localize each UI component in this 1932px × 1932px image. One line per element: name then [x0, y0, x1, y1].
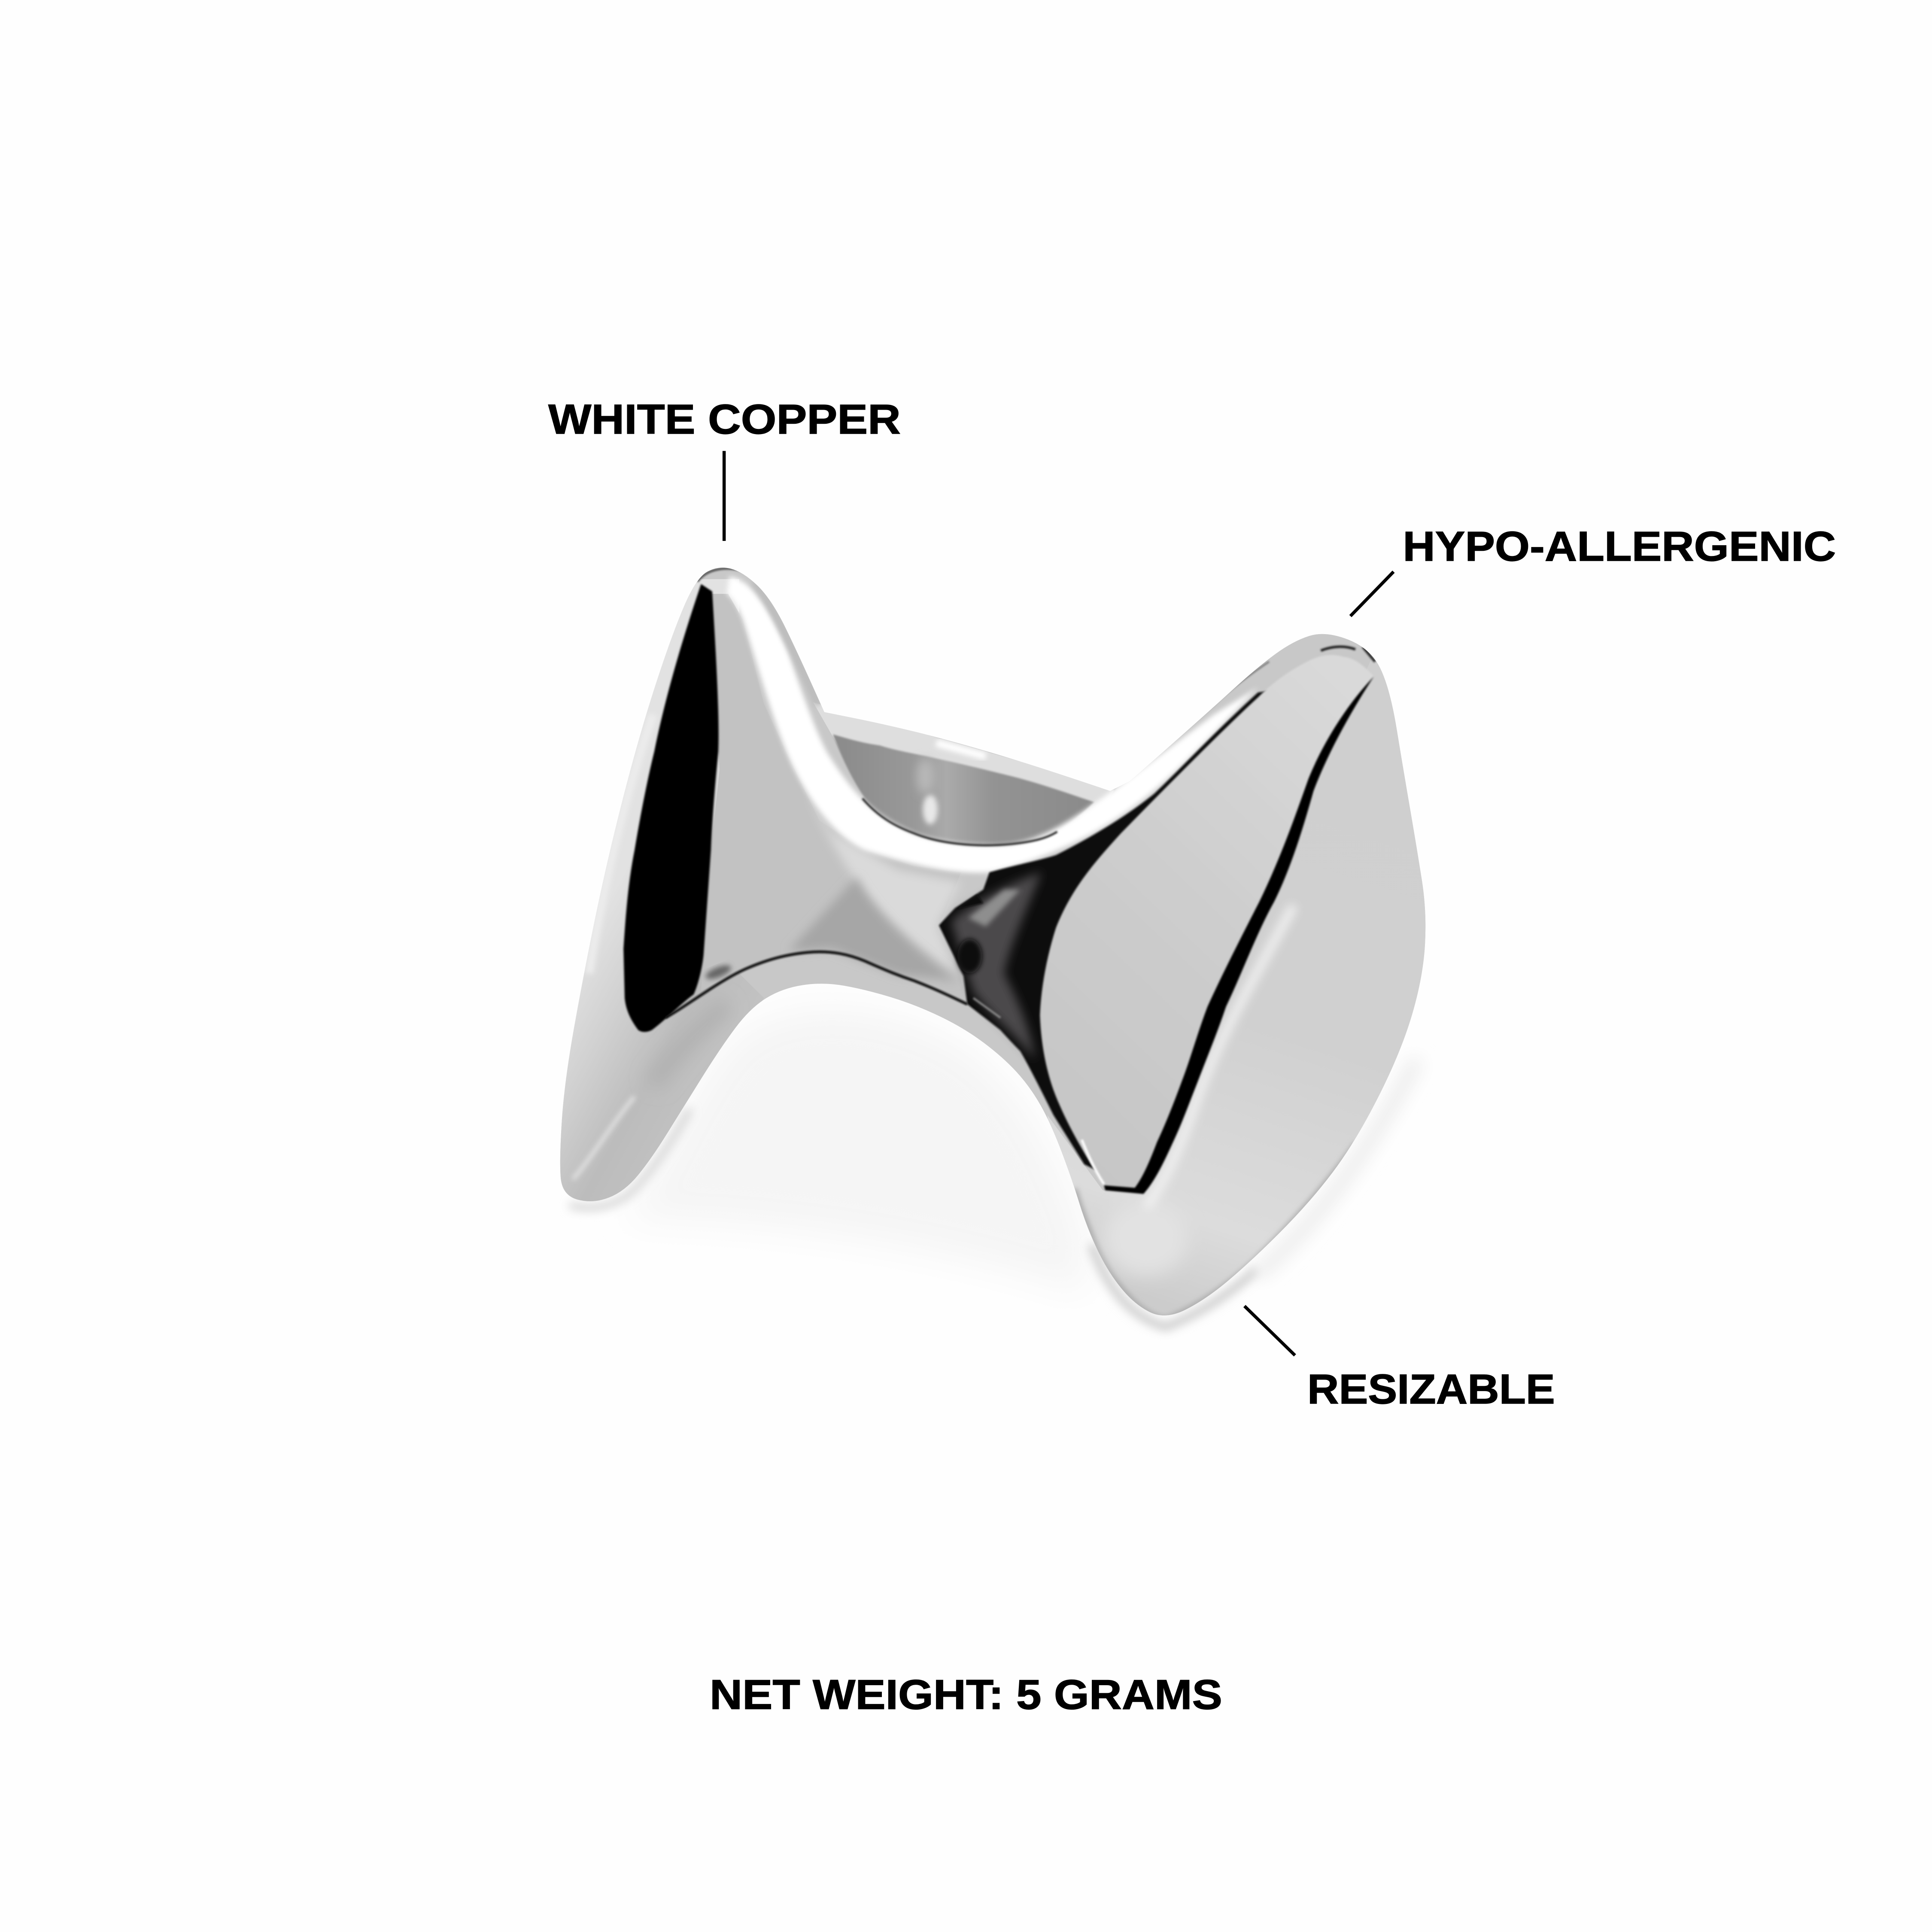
- lower body sheen: [1104, 1201, 1188, 1275]
- dark centre reflection: [939, 690, 1275, 1170]
- band interior: [833, 734, 1094, 847]
- leader line: hypo-allergenic: [1350, 572, 1394, 616]
- label: white copper: WHITE COPPER: [548, 396, 901, 443]
- right face panel: [1040, 655, 1374, 1188]
- prong rim light: [589, 715, 653, 973]
- leader line: resizable: [1245, 1306, 1295, 1355]
- band highlight: [923, 795, 938, 824]
- dark reflection grey mottling: [951, 872, 1041, 1060]
- band rim highlight: [936, 743, 986, 756]
- infographic canvas: [548, 404, 1835, 1710]
- mottle: dark mark: [956, 895, 983, 909]
- lower right edge shading: [1075, 1143, 1357, 1320]
- ring shadow: [569, 1009, 1417, 1327]
- grey rim on peak: [754, 582, 818, 705]
- thin white bottom glint: [1082, 1140, 1104, 1184]
- ring silhouette base: [560, 568, 1425, 1315]
- left prong shading: [542, 579, 764, 1232]
- mottle: lower glint: [973, 998, 1000, 1018]
- saddle darker shade: [789, 877, 957, 981]
- black reflection left: [623, 584, 719, 1032]
- top outline glint: [697, 568, 789, 622]
- lower lip dark edge: [665, 952, 967, 1018]
- saddle panel: [701, 594, 967, 1004]
- prong crease: [573, 1097, 635, 1179]
- top corner glint: [1321, 647, 1375, 662]
- thin inner edge line: [863, 799, 1057, 845]
- mottle: black lower shade: [957, 939, 982, 973]
- mottle: light grey patch: [969, 890, 1020, 927]
- band light streak: [917, 759, 934, 793]
- net weight caption: NET WEIGHT: 5 GRAMS: [710, 1671, 1222, 1718]
- right body base: [1047, 653, 1442, 1337]
- label: resizable: RESIZABLE: [1307, 1366, 1555, 1413]
- band rear rim: [813, 702, 1115, 806]
- dark smudge beside reflection: [704, 963, 733, 982]
- leader line: white copper: [723, 451, 725, 541]
- white upper highlight: [727, 577, 1258, 873]
- callout: resizable: [1245, 1306, 1555, 1413]
- black ridge crease: [1104, 677, 1374, 1194]
- label: hypo-allergenic: HYPO-ALLERGENIC: [1403, 523, 1836, 570]
- crease sheen: [1146, 905, 1294, 1207]
- prong lower shade: [653, 1004, 727, 1084]
- callout: hypo-allergenic: [1350, 523, 1836, 616]
- right shoulder rim lines: [1113, 662, 1269, 789]
- saddle light region: [807, 789, 961, 975]
- ring photo illustration: [542, 568, 1442, 1337]
- mottle: grey body: [951, 872, 1041, 1060]
